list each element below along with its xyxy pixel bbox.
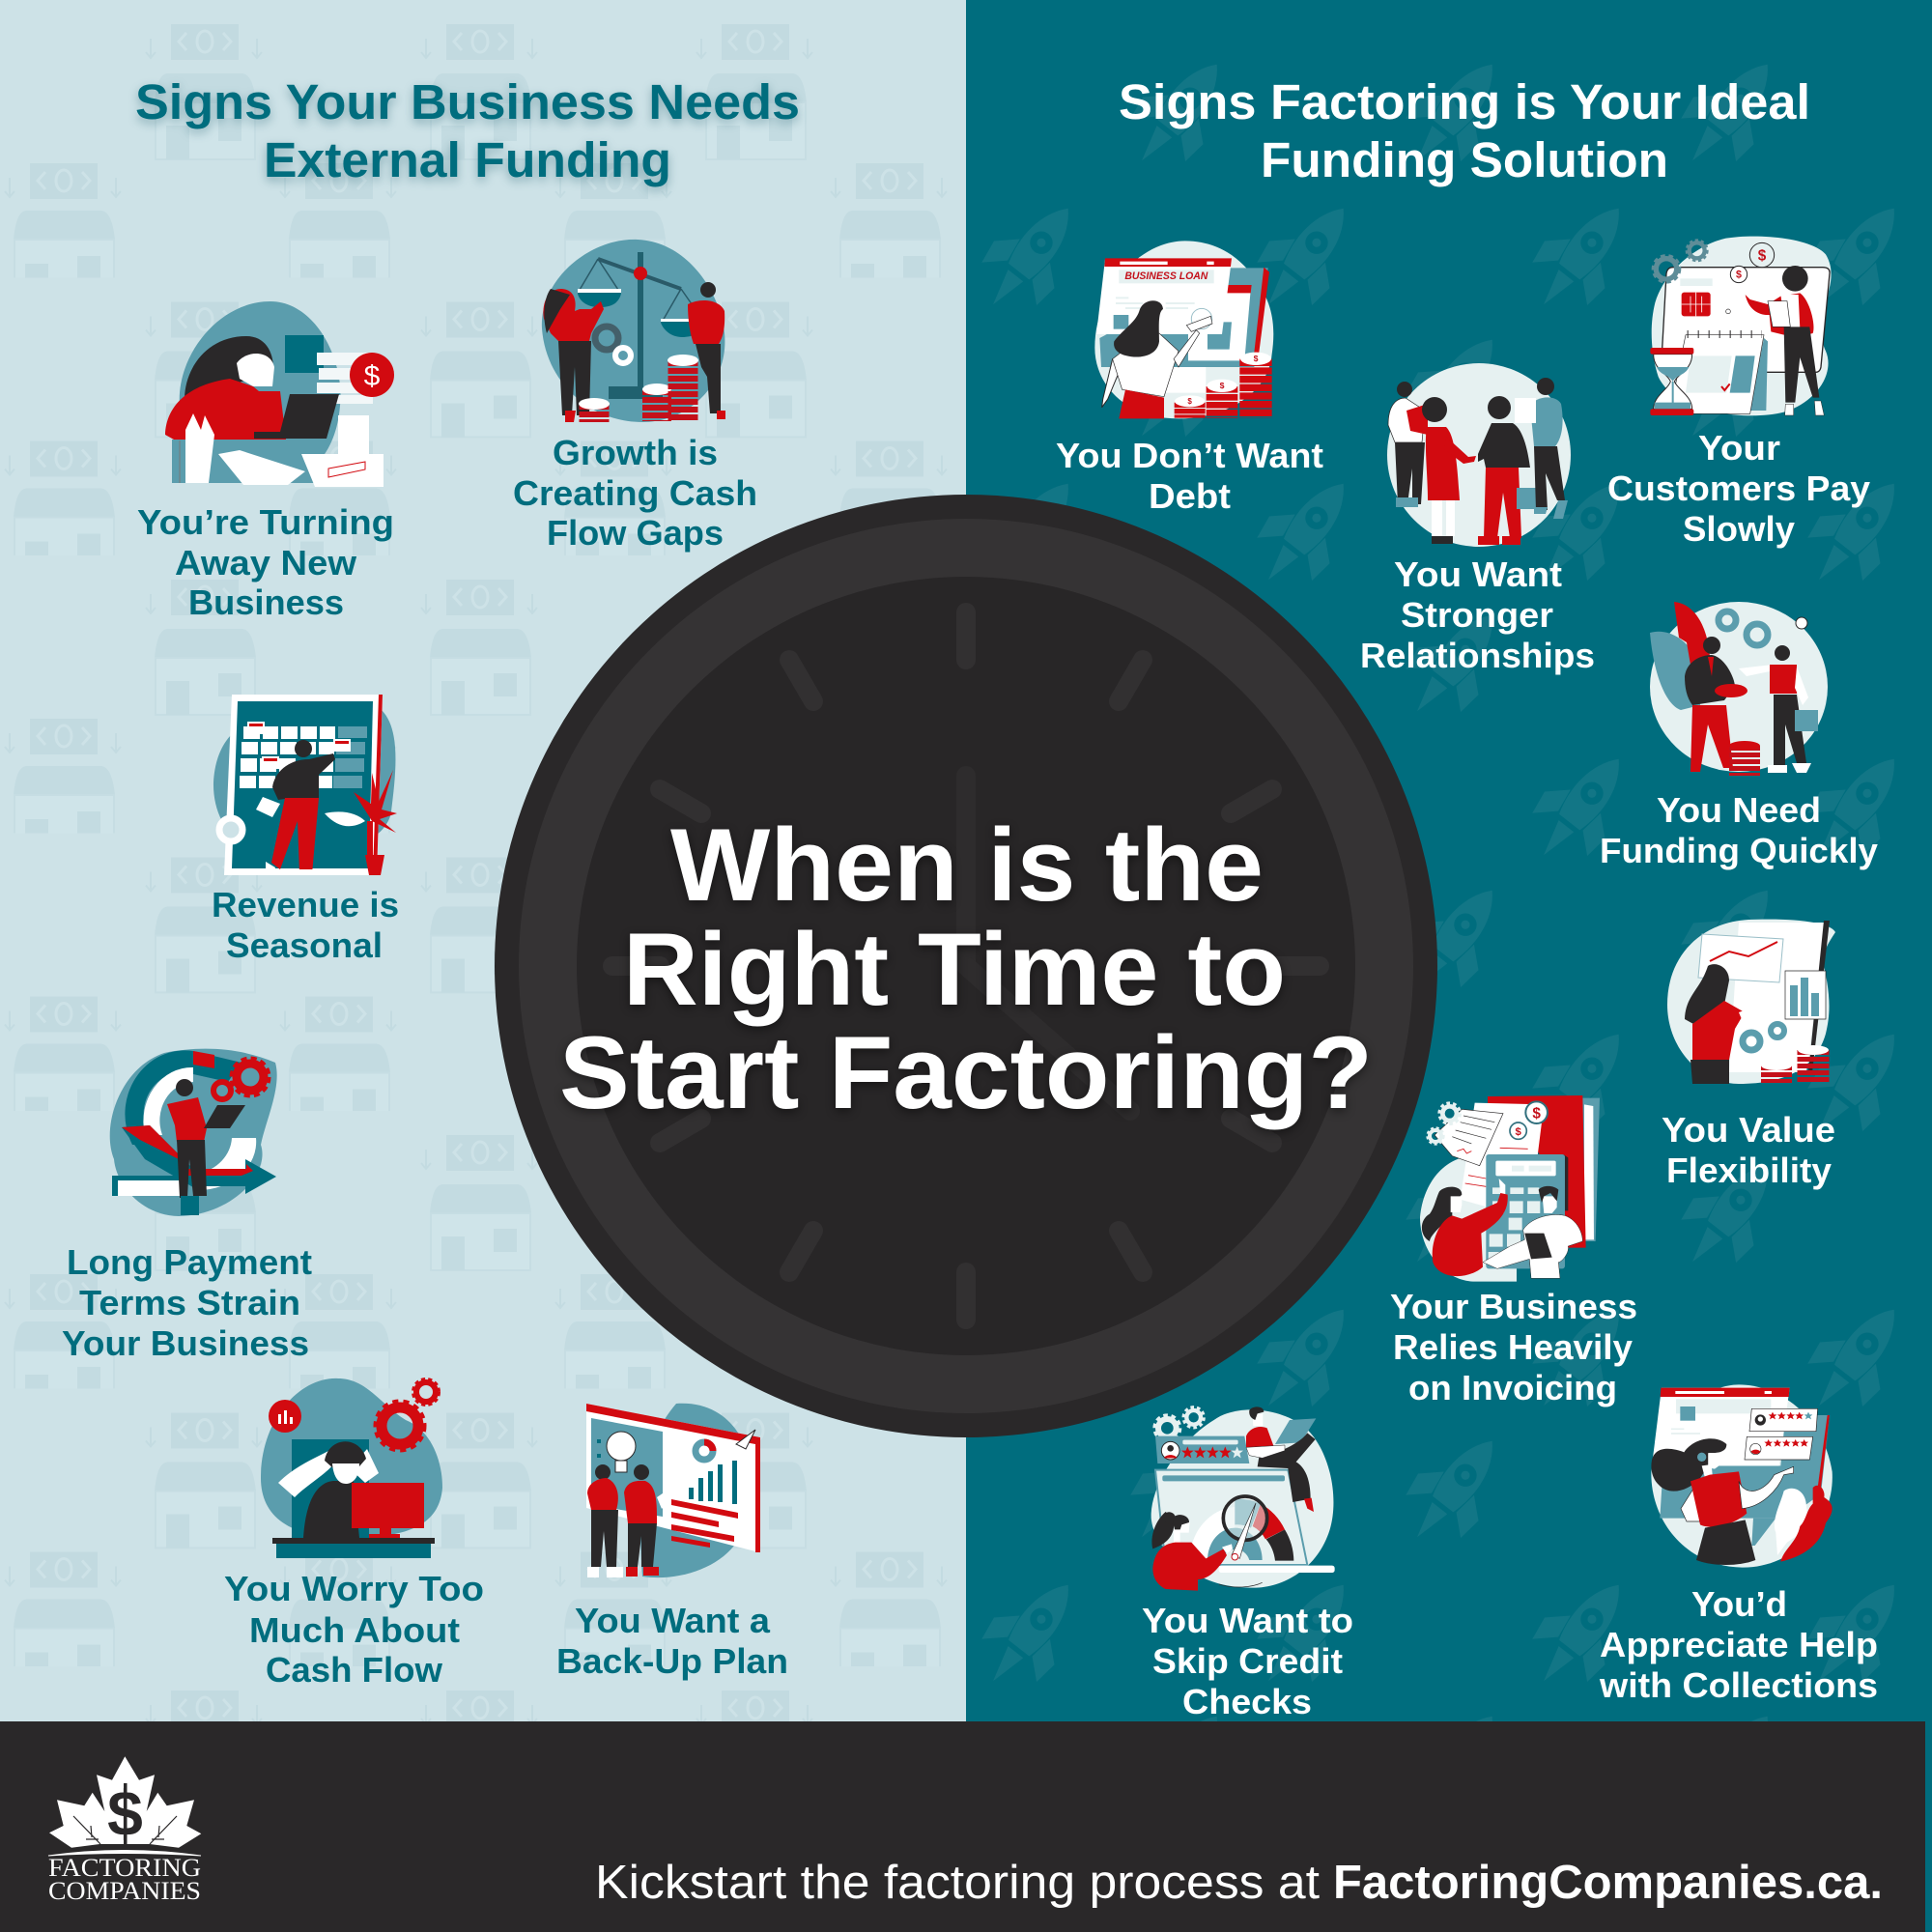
label: You're Turning Away New Business: Away New [175, 543, 357, 582]
label: You Want a Back-Up Plan [556, 1601, 788, 1681]
illustration: customers pay slowly: $ [1736, 270, 1742, 281]
label: You Want a Back-Up Plan: You Want a [575, 1601, 771, 1640]
label: You Need Funding Quickly: You Need [1657, 790, 1821, 830]
illustration: relies on invoicing [1420, 1095, 1600, 1282]
title: Start Factoring? [559, 1014, 1373, 1130]
heading: left column: Signs Your Business Needs [135, 74, 800, 129]
footer bar [0, 1721, 1925, 1932]
title: When is the [670, 807, 1264, 923]
label: Growth is Creating Cash Flow Gaps [513, 433, 757, 553]
illustration: worry about cash flow [261, 1378, 442, 1558]
heading: right column: Signs Factoring is Your Ideal [1119, 74, 1810, 129]
illustration: turning away new business [165, 301, 394, 487]
center clock: title disc [495, 495, 1437, 1437]
label: You Want to Skip Credit Checks: You Want to [1142, 1601, 1353, 1640]
heading: right column [1119, 74, 1810, 187]
logo: Factoring Companies maple leaf: COMPANIES [48, 1877, 201, 1905]
illustration: customers pay slowly [1650, 237, 1832, 415]
call to action: FactoringCompanies.ca. [1333, 1857, 1883, 1909]
panel: left background [0, 0, 966, 1721]
illustration: business loan: BUSINESS LOAN [1124, 270, 1208, 282]
label: Long Payment Terms Strain Your Business [62, 1242, 312, 1363]
label: You Want Stronger Relationships: Relationships [1360, 636, 1595, 675]
label: You're Turning Away New Business: Business [188, 582, 344, 622]
label: You Don't Want Debt: You Don’t Want [1056, 436, 1323, 475]
illustration: business loan: $ [1220, 381, 1225, 390]
label: Long Payment Terms Strain Your Business: Terms Strain [79, 1283, 300, 1322]
label: Revenue is Seasonal: Revenue is [212, 885, 399, 924]
illustration: value flexibility [1667, 920, 1835, 1084]
panel: right background [966, 0, 1932, 1932]
illustration: customers pay slowly: $ [1758, 247, 1767, 264]
label: Long Payment Terms Strain Your Business: Your Business [62, 1323, 309, 1363]
label: You Need Funding Quickly: Funding Quickly [1600, 831, 1878, 870]
label: You Want to Skip Credit Checks: Checks [1182, 1682, 1312, 1721]
label: Revenue is Seasonal: Seasonal [226, 925, 383, 965]
illustration: business loan [1094, 241, 1273, 418]
label: Your Customers Pay Slowly [1607, 428, 1870, 549]
label: You Want a Back-Up Plan: Back-Up Plan [556, 1641, 788, 1681]
label: Your Customers Pay Slowly: Customers Pay [1607, 469, 1870, 508]
label: Your Business Relies Heavily on Invoicing: Relies Heavily [1393, 1327, 1633, 1367]
label: You Want to Skip Credit Checks: Skip Credit [1152, 1641, 1343, 1681]
label: You'd Appreciate Help with Collections: with Collections [1599, 1665, 1878, 1705]
logo: Factoring Companies maple leaf: $ [107, 1777, 143, 1849]
label: Growth is Creating Cash Flow Gaps: Creating Cash [513, 473, 757, 513]
illustration: stronger relationships [1387, 363, 1571, 547]
label: You Don't Want Debt [1056, 436, 1323, 516]
title [559, 807, 1373, 1130]
label: You Value Flexibility [1662, 1110, 1835, 1190]
label: You're Turning Away New Business: You’re Turning [137, 502, 394, 542]
call to action [595, 1857, 1883, 1909]
illustration: scale with growth and cash gaps [542, 240, 725, 422]
label: You Worry Too Much About Cash Flow [224, 1569, 484, 1690]
label: You'd Appreciate Help with Collections: You’d [1691, 1584, 1787, 1624]
label: Long Payment Terms Strain Your Business: Long Payment [67, 1242, 312, 1282]
label: You Value Flexibility: You Value [1662, 1110, 1835, 1150]
heading: left column [135, 74, 800, 187]
illustration: business loan: $ [1187, 397, 1192, 406]
label: Your Customers Pay Slowly: Slowly [1683, 509, 1795, 549]
illustration: relies on invoicing: $ [1532, 1105, 1541, 1122]
label: Your Business Relies Heavily on Invoicing [1390, 1287, 1637, 1407]
illustration: turning away new business: $ [364, 360, 381, 392]
heading: left column: External Funding [264, 132, 671, 187]
label: You Worry Too Much About Cash Flow: Much About [249, 1610, 460, 1650]
label: You Need Funding Quickly [1600, 790, 1878, 870]
illustration: relies on invoicing: $ [1516, 1126, 1522, 1138]
label: You Want Stronger Relationships: Stronger [1401, 595, 1553, 635]
illustration: help with collections [1651, 1384, 1833, 1568]
label: You're Turning Away New Business [137, 502, 394, 622]
label: You Worry Too Much About Cash Flow: Cash Flow [266, 1650, 443, 1690]
label: Growth is Creating Cash Flow Gaps: Growth is [553, 433, 718, 472]
label: You Don't Want Debt: Debt [1149, 476, 1231, 516]
label: You Value Flexibility: Flexibility [1666, 1151, 1832, 1190]
label: Your Business Relies Heavily on Invoicing: on Invoicing [1408, 1368, 1617, 1407]
logo: Factoring Companies maple leaf: FACTORING [48, 1854, 201, 1882]
label: Your Customers Pay Slowly: Your [1698, 428, 1780, 468]
label: You'd Appreciate Help with Collections [1599, 1584, 1878, 1705]
heading: right column: Funding Solution [1261, 132, 1668, 187]
illustration: long payment terms [110, 1049, 277, 1216]
label: You Want Stronger Relationships [1360, 554, 1595, 675]
label: Revenue is Seasonal [212, 885, 399, 965]
label: You Worry Too Much About Cash Flow: You Worry Too [224, 1569, 484, 1608]
illustration: seasonal revenue calendar [213, 695, 397, 875]
label: You Want Stronger Relationships: You Want [1394, 554, 1562, 594]
label: You Want to Skip Credit Checks [1142, 1601, 1353, 1721]
label: Growth is Creating Cash Flow Gaps: Flow Gaps [547, 513, 724, 553]
illustration: business loan: $ [1254, 354, 1259, 363]
label: Your Business Relies Heavily on Invoicing: Your Business [1390, 1287, 1637, 1326]
illustration: skip credit checks [1151, 1406, 1335, 1591]
title: Right Time to [623, 911, 1286, 1027]
label: You'd Appreciate Help with Collections: Appreciate Help [1600, 1625, 1878, 1664]
illustration: funding quickly [1650, 602, 1828, 776]
call to action: Kickstart the factoring process at [595, 1857, 1320, 1909]
illustration: back-up plan presentation [586, 1404, 760, 1577]
logo: Factoring Companies maple leaf [48, 1756, 201, 1905]
